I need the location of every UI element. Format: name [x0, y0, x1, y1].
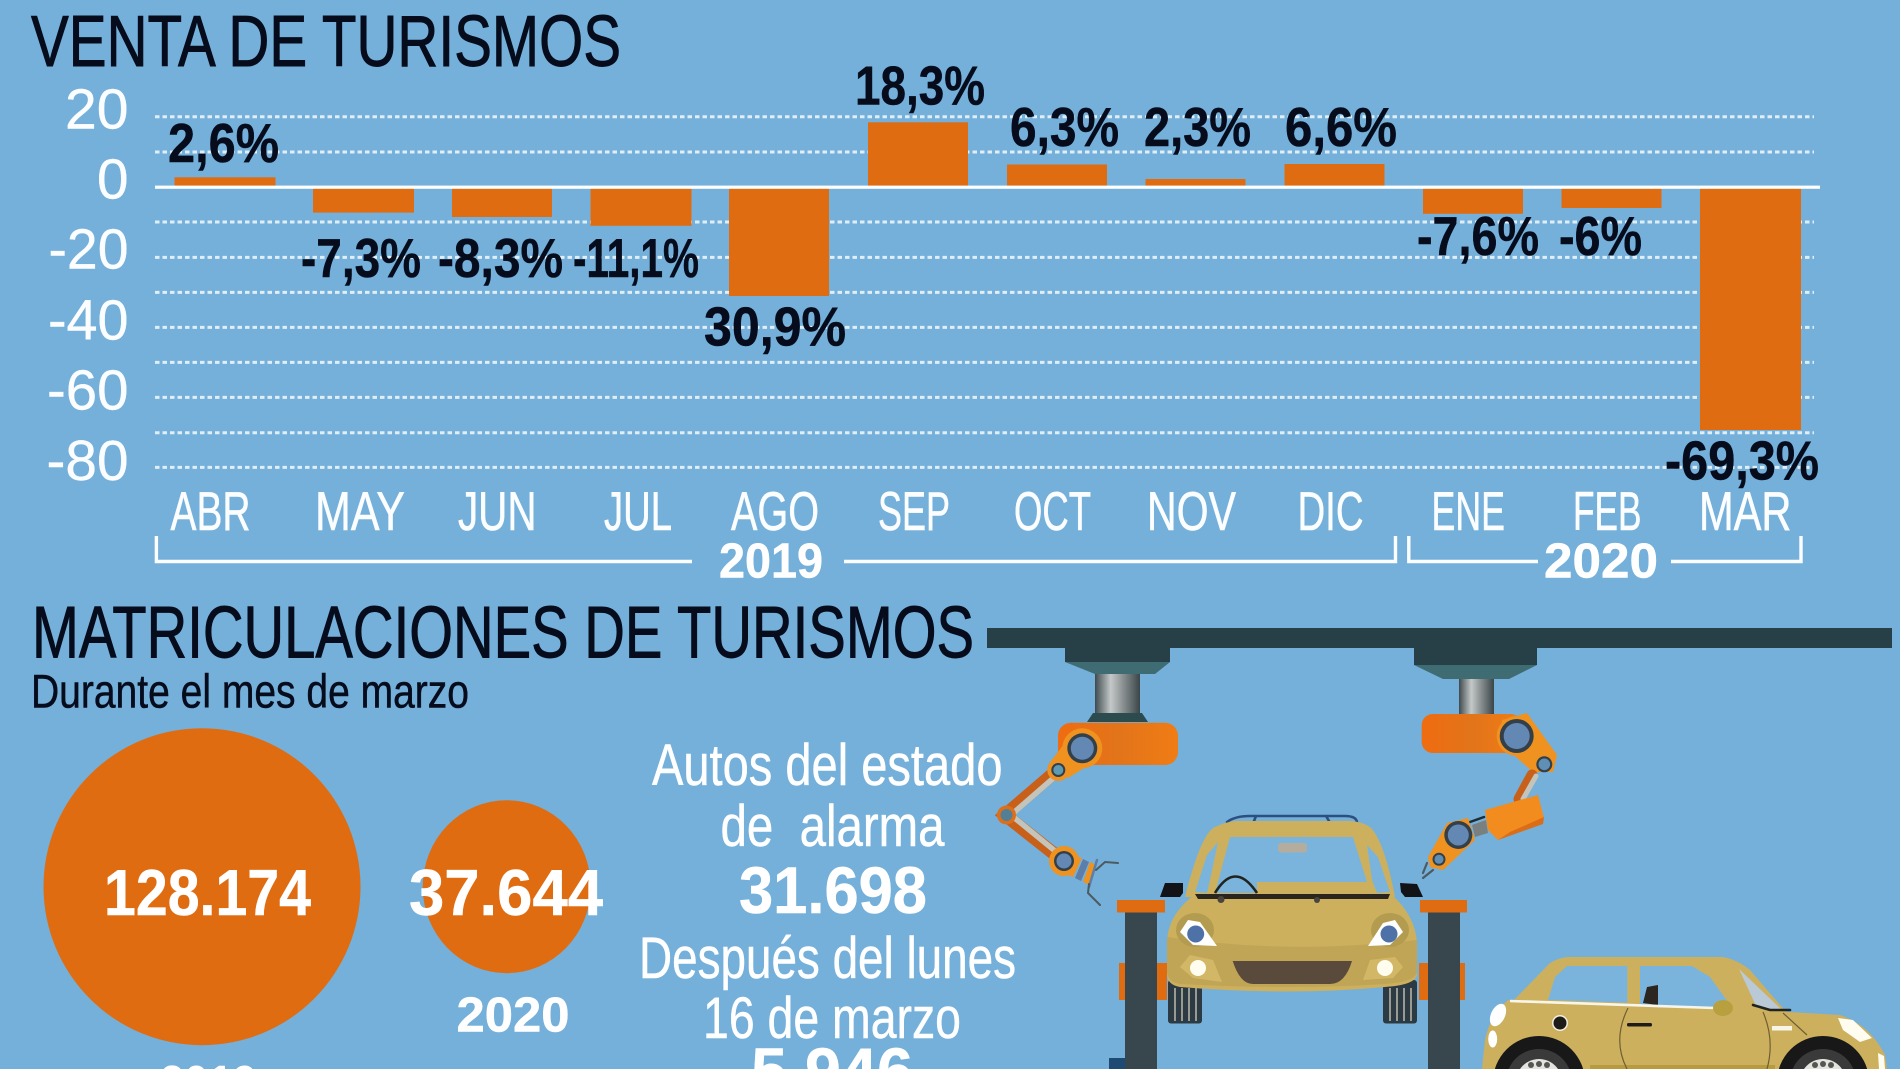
- headlight: [1838, 1018, 1872, 1042]
- value labels: 2,6%: [168, 112, 279, 174]
- steering wheel: [1215, 876, 1257, 893]
- value labels: 6,6%: [1285, 96, 1397, 158]
- bubble: 2019: 128.174: [104, 856, 311, 929]
- year bracket: 2020: 2020: [1544, 535, 1658, 589]
- car: front view: [1160, 816, 1423, 1024]
- value labels: -11,1%: [573, 227, 699, 289]
- tail lights: [1487, 1001, 1509, 1029]
- wheels: [1168, 980, 1417, 1024]
- robot arm: left: [997, 648, 1178, 905]
- month labels: OCT: [1014, 480, 1091, 542]
- text block: después del lunes 16 de marzo: Después del lunes: [639, 926, 1016, 991]
- y axis labels: -60: [47, 358, 128, 422]
- body: [1167, 894, 1417, 992]
- month labels: NOV: [1147, 480, 1236, 542]
- text block: autos del estado de alarma: 31.698: [739, 853, 927, 927]
- subtitle: Durante el mes de marzo: [31, 665, 469, 718]
- car lift: [1109, 900, 1467, 1069]
- value labels: -8,3%: [438, 227, 563, 289]
- grille: [1233, 961, 1352, 984]
- y axis labels: 0: [97, 148, 128, 212]
- text block: autos del estado de alarma: de alarma: [720, 794, 945, 859]
- value labels: -6%: [1559, 205, 1642, 267]
- y axis labels: -20: [48, 218, 128, 282]
- month labels: DIC: [1298, 480, 1364, 542]
- wheel: front: [1777, 1036, 1869, 1069]
- bar chart: venta de turismos: [46, 54, 1820, 589]
- title: venta de turismos: VENTA DE TURISMOS: [31, 2, 621, 82]
- value labels: -69,3%: [1665, 430, 1819, 492]
- month labels: [170, 480, 1792, 542]
- value labels: 2,3%: [1144, 96, 1251, 158]
- month labels: ENE: [1432, 480, 1505, 542]
- month labels: FEB: [1573, 480, 1642, 542]
- bubble: 2019: [44, 728, 360, 1069]
- year bracket: 2019: 2019: [719, 535, 823, 589]
- side mirror: [1713, 1000, 1733, 1016]
- text block: autos del estado de alarma: [652, 733, 1002, 927]
- value labels: 18,3%: [855, 54, 985, 116]
- zero line: [155, 186, 1820, 189]
- y axis labels: -80: [46, 429, 128, 493]
- month labels: MAR: [1699, 480, 1792, 542]
- value labels: -7,6%: [1417, 205, 1539, 267]
- y axis labels: -40: [48, 288, 128, 352]
- bubble: 2020: 37.644: [409, 856, 603, 929]
- fog lights: [1180, 955, 1222, 982]
- text block: después del lunes 16 de marzo: [639, 926, 1016, 1069]
- wheel: rear: [1493, 1036, 1585, 1069]
- y axis labels: 20: [65, 78, 128, 142]
- year bracket: 2020: [1409, 535, 1801, 589]
- month labels: MAY: [315, 480, 405, 542]
- value labels: -7,3%: [301, 227, 421, 289]
- year bracket: 2019: [156, 535, 1395, 589]
- fuel cap: [1552, 1015, 1568, 1031]
- mirrors: [1160, 883, 1183, 897]
- bars: [174, 122, 1801, 430]
- y axis labels: [46, 78, 128, 493]
- text block: después del lunes 16 de marzo: 16 de marzo: [703, 986, 961, 1051]
- month labels: AGO: [731, 480, 819, 542]
- illustration: car factory: [987, 628, 1892, 1069]
- cabin: [1185, 821, 1395, 897]
- bubble: 2020: [409, 800, 603, 1043]
- month labels: SEP: [878, 480, 950, 542]
- robot arm: right: [1414, 648, 1557, 878]
- title: matriculaciones de turismos: MATRICULACIONES DE TURISMOS: [32, 592, 974, 673]
- rear-view mirror: [1278, 843, 1307, 852]
- overhead beam: [987, 628, 1892, 648]
- car: side view: [1482, 957, 1887, 1069]
- month labels: JUN: [458, 480, 536, 542]
- door handle: [1627, 1023, 1652, 1026]
- headlights: [1176, 913, 1214, 947]
- roof rack: [1227, 816, 1357, 822]
- value labels: 30,9%: [704, 296, 846, 358]
- wiper bar: [1195, 894, 1390, 899]
- text block: autos del estado de alarma: Autos del estado: [652, 733, 1002, 798]
- month labels: ABR: [170, 480, 250, 542]
- value labels: [168, 54, 1819, 492]
- bubble: 2020: 2020: [456, 989, 570, 1043]
- value labels: 6,3%: [1010, 96, 1119, 158]
- month labels: JUL: [604, 480, 672, 542]
